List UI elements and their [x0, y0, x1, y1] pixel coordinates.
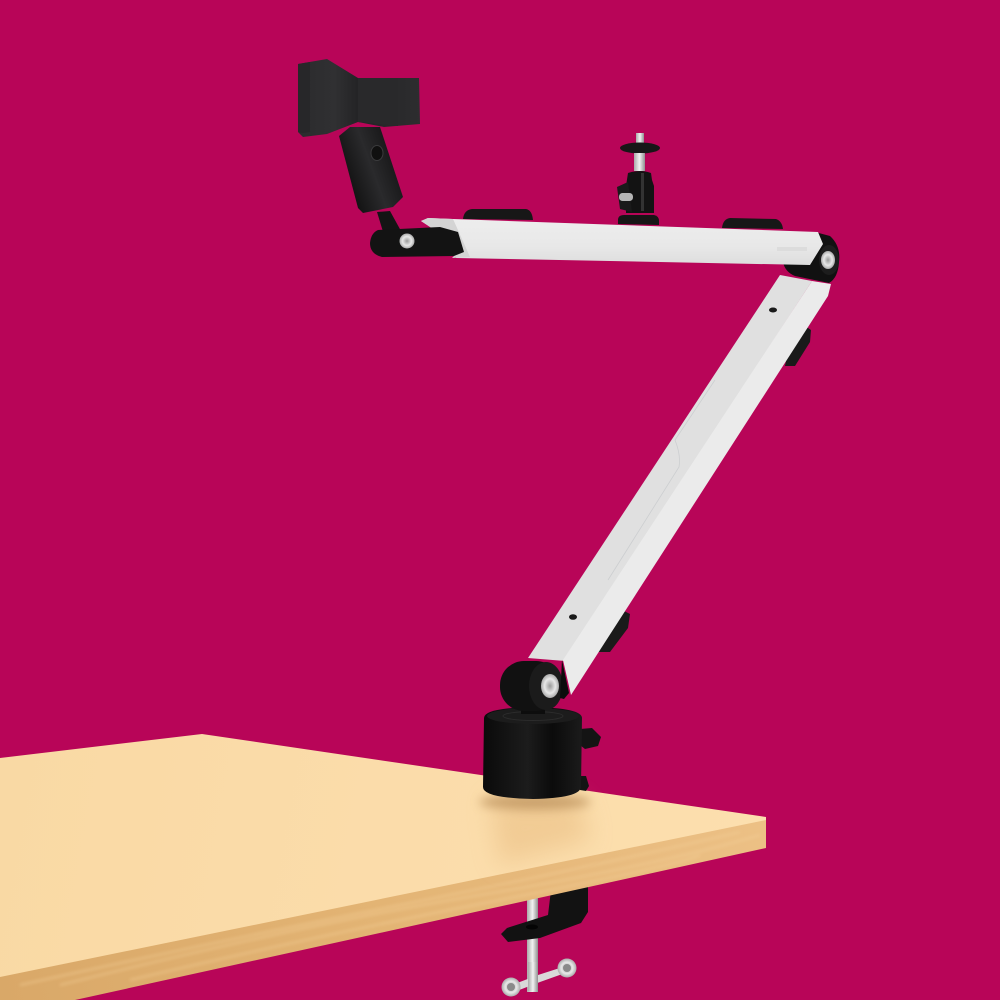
desk wood grain [20, 832, 760, 985]
top arm body [421, 218, 823, 265]
top arm end cap [421, 218, 470, 258]
base shadow on desk [479, 794, 591, 810]
arm logo mark [777, 247, 807, 251]
clamp screw [527, 895, 538, 992]
microphone holder [298, 59, 464, 257]
mount side knob [617, 182, 632, 212]
microphone clip [298, 59, 420, 137]
elbow joint [783, 232, 839, 283]
holder pivot screw [371, 146, 383, 160]
elbow bolt [821, 251, 835, 269]
base reflection on desk [490, 800, 590, 865]
clamp handle [502, 958, 576, 996]
desk [0, 734, 766, 1000]
swivel bolt [400, 234, 414, 248]
clamp black arm [501, 884, 588, 942]
top arm pads [463, 209, 783, 229]
base roller joint [500, 660, 569, 714]
top arm [421, 218, 823, 265]
joint bolt [541, 674, 559, 698]
lower screw hole [569, 614, 577, 620]
lower arm seam [608, 380, 715, 580]
upper screw hole [769, 308, 777, 312]
mount post [634, 153, 645, 171]
desk top [0, 734, 766, 977]
clamp screw collar [526, 924, 538, 930]
base cylinder [483, 707, 582, 799]
desk front edge [0, 818, 766, 1000]
holder barrel [339, 127, 403, 213]
mount body [626, 171, 654, 213]
clamp below desk [501, 884, 588, 996]
mount stud [636, 133, 644, 145]
ball head mount [617, 133, 660, 225]
lower arm left face [528, 275, 812, 661]
holder swivel joint [370, 227, 464, 257]
lower arm back pads [598, 326, 811, 652]
mount disc [620, 142, 660, 154]
lower arm [528, 275, 831, 695]
mount foot [618, 215, 659, 225]
holder stem [377, 211, 401, 235]
base clamp knobs [580, 728, 601, 791]
lower arm right face [563, 281, 831, 695]
